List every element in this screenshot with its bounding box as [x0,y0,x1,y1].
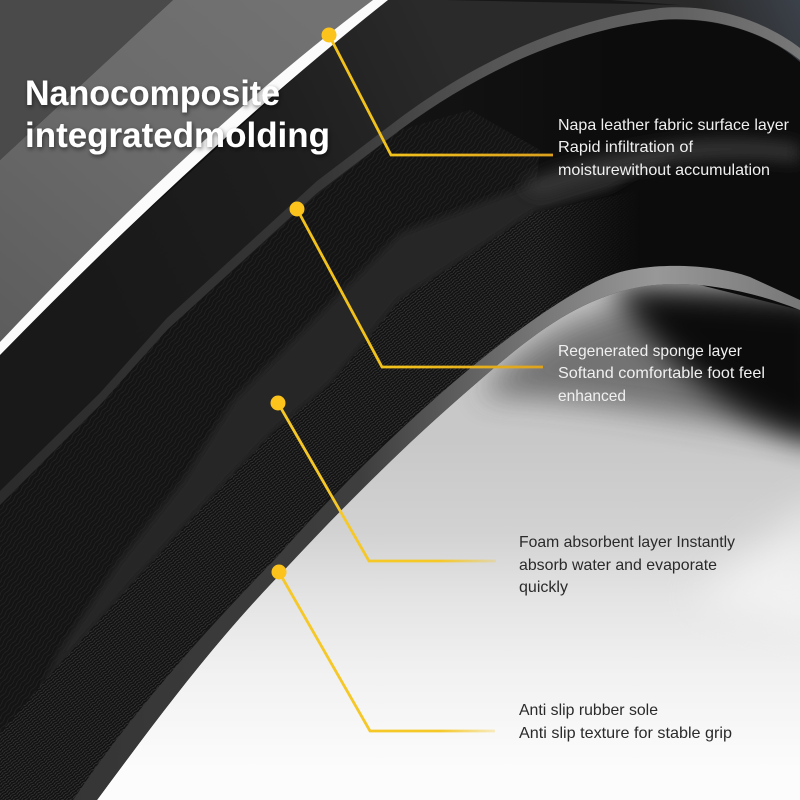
leader line 1 [329,35,553,155]
callout 4: anti slip rubber sole [272,564,732,742]
callout 2: regenerated sponge layer [290,202,765,405]
wavy fibre layer [0,110,540,733]
caption 3 [519,534,735,596]
leader line 2 [297,209,543,367]
title: Nanocomposite [25,74,280,113]
marker dot 3 [270,396,286,410]
caption 2: Softand comfortable foot feel [558,365,765,382]
caption 1: Rapid infiltration of [558,139,694,156]
marker dot 4 [272,564,286,580]
caption 4: Anti slip texture for stable grip [519,725,732,742]
title [25,74,330,155]
caption 1 [558,117,790,179]
white edge stripe [0,0,388,355]
caption 1: moisturewithout accumulation [558,162,770,179]
second arch stripe [0,7,800,505]
caption 2 [558,343,765,405]
callout 3: foam absorbent layer [270,396,735,596]
caption 3: quickly [519,579,568,596]
upper left grey band [0,0,380,348]
caption 1: Napa leather fabric surface layer [558,117,790,134]
shadow beneath the arch [480,285,800,630]
lit floor [97,284,800,800]
caption 4 [519,702,732,742]
leader line 3 [278,403,496,561]
top dark strip [445,0,680,5]
leader line 4 [279,572,495,731]
lighter foam band [40,150,680,690]
upper surface between white stripe and first arch [0,0,800,510]
caption 4: Anti slip rubber sole [519,702,658,719]
title: integratedmolding [25,116,330,155]
textured leather band [0,190,640,800]
caption 2: Regenerated sponge layer [558,343,743,360]
sole arch stripe [73,266,800,800]
marker dot 1 [322,28,336,42]
caption 2: enhanced [558,388,626,405]
caption 3: absorb water and evaporate [519,557,717,574]
callout 1: Napa leather surface layer [322,28,790,179]
glow streak behind top caption [520,140,800,195]
marker dot 2 [290,202,304,216]
upper left dark grey area [0,0,173,160]
caption 3: Foam absorbent layer Instantly [519,534,735,551]
